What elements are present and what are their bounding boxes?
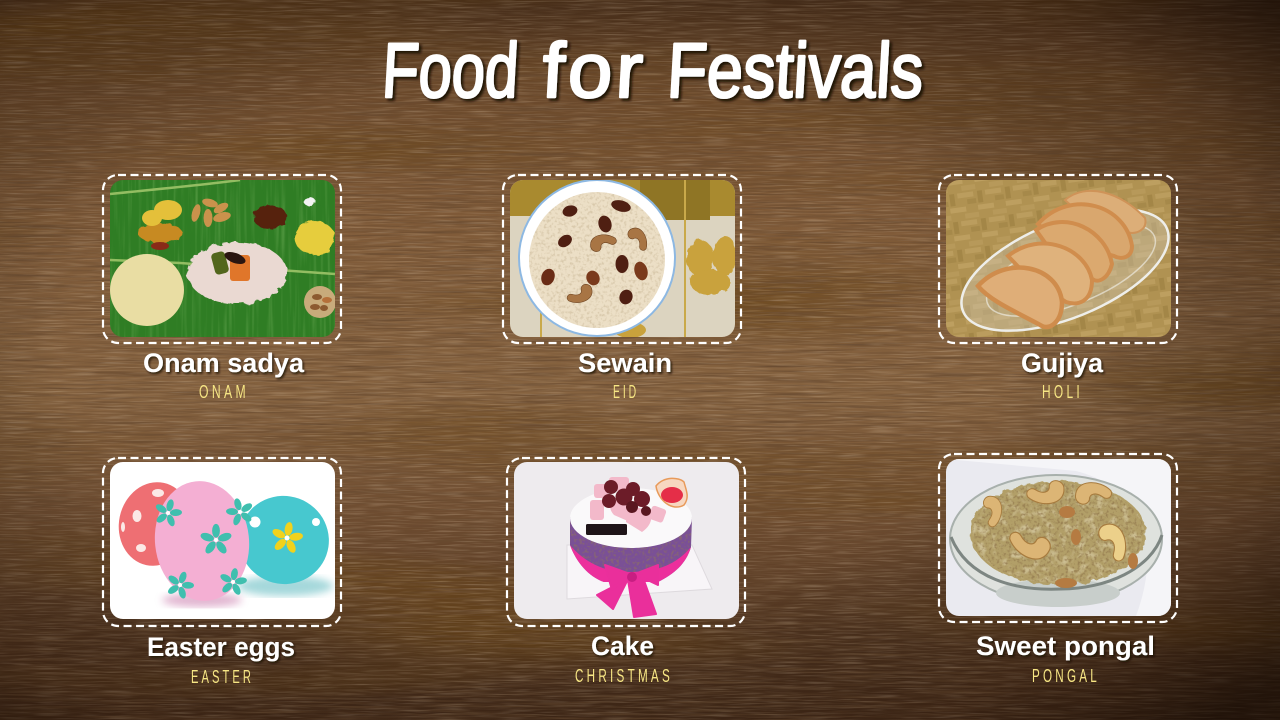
photo: ribbon cake bbox=[514, 462, 739, 619]
title: Festivals bbox=[665, 26, 926, 114]
festival name: CHRISTMAS bbox=[575, 666, 673, 686]
food name: Sewain bbox=[578, 348, 672, 378]
panel: Cake bbox=[507, 458, 745, 686]
panel: Onam sadya bbox=[103, 175, 341, 402]
festival name: PONGAL bbox=[1032, 666, 1100, 686]
festival name: EASTER bbox=[191, 667, 254, 687]
festival name: EID bbox=[613, 382, 639, 402]
panel: Sewain bbox=[503, 175, 741, 402]
dashed frame bbox=[103, 175, 341, 343]
dashed frame bbox=[939, 454, 1177, 622]
photo: sweet pongal in glass bowl bbox=[946, 459, 1171, 616]
food name: Sweet pongal bbox=[976, 631, 1155, 661]
dashed frame bbox=[503, 175, 741, 343]
food name: Cake bbox=[591, 631, 654, 661]
panel: Sweet pongal bbox=[939, 454, 1177, 686]
dashed frame bbox=[507, 458, 745, 626]
title: Food bbox=[380, 26, 521, 114]
panel: Gujiya bbox=[939, 175, 1185, 402]
panel: Easter eggs bbox=[103, 458, 341, 687]
title bbox=[380, 26, 926, 114]
title: for bbox=[540, 26, 649, 114]
festival name: ONAM bbox=[199, 382, 249, 402]
photo: gujiya on glass plate bbox=[946, 180, 1171, 337]
festival name: HOLI bbox=[1042, 382, 1083, 402]
photo: painted eggs bbox=[110, 462, 341, 619]
dashed frame bbox=[939, 175, 1177, 343]
food name: Onam sadya bbox=[143, 348, 305, 378]
dashed frame bbox=[103, 458, 341, 626]
food name: Easter eggs bbox=[147, 632, 295, 662]
food name: Gujiya bbox=[1021, 348, 1104, 378]
photo: banana leaf meal bbox=[110, 180, 336, 337]
photo: vermicelli bowl bbox=[510, 179, 737, 338]
